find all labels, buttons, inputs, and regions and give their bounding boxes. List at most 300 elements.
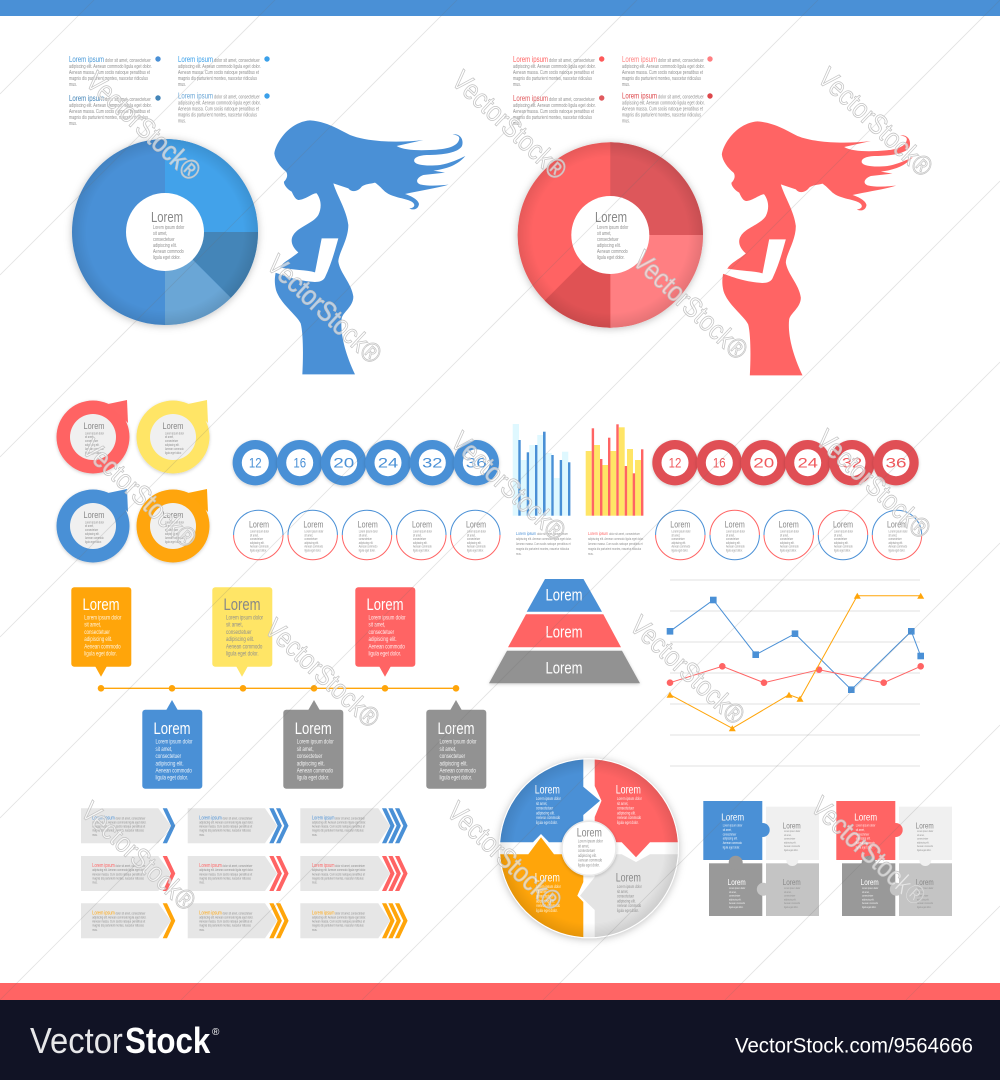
orange row: Lorem ipsum bbox=[92, 910, 115, 916]
pyramid tier 1: Lorem bbox=[545, 586, 583, 605]
red legend item 4: dolor sit amet, consectetuer bbox=[658, 94, 704, 100]
watermarks: VectorStock® bbox=[446, 64, 573, 186]
blue numbered rings: 16 bbox=[293, 456, 306, 471]
blue puzzle: consectetuer bbox=[729, 894, 740, 898]
red donut chart: Lorem ipsum dolor bbox=[597, 224, 629, 231]
thin circle 3: ligula eget dolor. bbox=[359, 548, 376, 553]
red puzzle: ligula eget dolor. bbox=[862, 906, 877, 909]
top blue bar bbox=[0, 0, 1000, 16]
blue quadrant: Aenean commodo bbox=[536, 816, 560, 820]
gray quadrant: Lorem ipsum dolor bbox=[617, 885, 642, 889]
orange quadrant: Lorem bbox=[535, 872, 560, 885]
watermarks bbox=[75, 61, 939, 917]
orange bubble: sit amet, bbox=[165, 524, 174, 528]
blue row: mus. bbox=[92, 832, 98, 837]
red row: Aenean massa. Cum sociis natoque penatibus et bbox=[199, 872, 252, 876]
blue puzzle: Lorem ipsum dolor bbox=[729, 887, 745, 890]
red bubble: adipiscing elit. bbox=[85, 442, 100, 447]
legend item 2: magnis dis parturient montes, nascetur ridiculus bbox=[178, 75, 257, 81]
legend item 4 bbox=[178, 92, 270, 124]
red legend item 1: Aenean massa. Cum sociis natoque penatibus et bbox=[513, 69, 595, 75]
legend item 1: adipiscing elit. Aenean commodo ligula eget dolor. bbox=[69, 63, 152, 69]
red puzzle: Lorem ipsum dolor bbox=[917, 830, 933, 833]
red legend item 2: magnis dis parturient montes, nascetur ridiculus bbox=[622, 75, 701, 81]
red card: Lorem bbox=[366, 595, 404, 614]
arrow cards grid bbox=[81, 808, 408, 938]
thin circle 1: sit amet, bbox=[250, 533, 259, 537]
blue bar chart caption bbox=[516, 530, 572, 556]
blue puzzle: consectetuer bbox=[723, 832, 736, 836]
blue puzzle: Aenean commodo bbox=[723, 841, 742, 845]
red puzzle: adipiscing elit. bbox=[917, 898, 930, 902]
red puzzle: consectetuer bbox=[917, 894, 928, 898]
red donut chart: Lorem bbox=[595, 209, 627, 225]
thin circle 6: adipiscing elit. bbox=[672, 540, 686, 545]
red row: adipiscing elit. Aenean commodo ligula eget dolor. bbox=[92, 868, 146, 872]
legend item 1: mus. bbox=[69, 81, 77, 87]
thin circle 9: Lorem ipsum dolor bbox=[834, 529, 853, 534]
orange quadrant: Lorem ipsum dolor bbox=[536, 885, 561, 889]
orange row: Lorem ipsum bbox=[199, 910, 222, 916]
red numbered rings: 20 bbox=[753, 456, 774, 471]
red puzzle: Aenean commodo bbox=[862, 902, 878, 905]
gray quadrant: ligula eget dolor. bbox=[617, 908, 639, 913]
blue bar chart caption: adipiscing elit. Aenean commodo ligula eget dolor. bbox=[516, 536, 572, 541]
thin circle 2 bbox=[288, 510, 337, 560]
thin circle 4: Aenean commodo bbox=[413, 544, 432, 549]
blue row: Lorem ipsum bbox=[312, 815, 335, 821]
thin circle 3 bbox=[342, 510, 392, 560]
blue series bbox=[667, 597, 924, 693]
thin circle 2: sit amet, bbox=[304, 533, 313, 537]
legend item 1: magnis dis parturient montes, nascetur ridiculus bbox=[69, 75, 148, 81]
thin circle 8: consectetuer bbox=[780, 537, 793, 541]
thin circle 4: adipiscing elit. bbox=[413, 540, 428, 545]
legend item 4: Aenean massa. Cum sociis natoque penatibus et bbox=[178, 106, 260, 112]
red donut chart: ligula eget dolor. bbox=[597, 254, 625, 261]
red numbered rings: 36 bbox=[885, 456, 907, 471]
yellow card: Lorem bbox=[223, 595, 261, 614]
center hub: ligula eget dolor. bbox=[578, 863, 600, 868]
red legend item 2 bbox=[622, 55, 713, 87]
red row: mus. bbox=[199, 880, 205, 885]
thin circle 3: sit amet, bbox=[359, 533, 368, 537]
yellow card: adipiscing elit. bbox=[226, 636, 254, 643]
watermarks: VectorStock® bbox=[627, 244, 754, 366]
blue bubble: consectetuer bbox=[85, 528, 98, 532]
blue-red thin text circles bbox=[234, 510, 500, 560]
red legend item 4: Lorem ipsum bbox=[622, 92, 657, 101]
blue bar chart caption: Aenean massa. Cum sociis natoque penatibus et bbox=[516, 541, 571, 546]
footer logo: Vector bbox=[30, 1022, 123, 1061]
blue donut chart: Aenean commodo bbox=[153, 248, 184, 255]
red row: Aenean massa. Cum sociis natoque penatibus et bbox=[92, 872, 145, 876]
red legend item 1 bbox=[513, 55, 604, 87]
thin circle 7: consectetuer bbox=[726, 537, 739, 541]
red row: dolor sit amet, consectetuer bbox=[116, 863, 145, 868]
thin circle 6: Lorem bbox=[670, 520, 690, 530]
thin circle 9: sit amet, bbox=[834, 533, 843, 537]
orange bubble: consectetuer bbox=[165, 528, 178, 532]
red row: magnis dis parturient montes, nascetur ridiculus bbox=[312, 876, 364, 881]
blue puzzle: ligula eget dolor. bbox=[784, 906, 799, 909]
legend item 3: magnis dis parturient montes, nascetur ridiculus bbox=[69, 114, 148, 120]
thin circle 7: Aenean commodo bbox=[726, 544, 745, 549]
orange row: adipiscing elit. Aenean commodo ligula eget dolor. bbox=[199, 915, 253, 920]
footer logo bbox=[30, 1021, 220, 1062]
red puzzle: Lorem bbox=[861, 877, 879, 887]
yellow bubble: ligula eget dolor. bbox=[165, 450, 182, 455]
blue puzzle: adipiscing elit. bbox=[784, 898, 797, 902]
red bar chart caption: adipiscing elit. Aenean commodo ligula eget dolor. bbox=[588, 536, 644, 541]
blue puzzle: sit amet, bbox=[729, 890, 737, 894]
footer logo: ® bbox=[212, 1027, 220, 1038]
thin circle 6 bbox=[656, 510, 705, 560]
orange quadrant: ligula eget dolor. bbox=[536, 908, 558, 913]
thin circle 2: Aenean commodo bbox=[304, 544, 323, 549]
red legend item 3: Lorem ipsum bbox=[513, 94, 548, 103]
thin circle 8: adipiscing elit. bbox=[780, 540, 795, 545]
yellow card: Aenean commodo bbox=[226, 644, 262, 651]
gray quadrant: Lorem bbox=[616, 872, 641, 885]
red bubble: Lorem bbox=[84, 420, 104, 431]
blue numbered rings: 12 bbox=[249, 456, 262, 471]
blue bubble: ligula eget dolor. bbox=[85, 539, 102, 544]
blue puzzle: Aenean commodo bbox=[784, 845, 800, 848]
pyramid tier 2 bbox=[508, 614, 621, 647]
thin circle 1: Lorem bbox=[249, 520, 269, 530]
orange row: magnis dis parturient montes, nascetur ridiculus bbox=[199, 923, 251, 928]
red row bbox=[81, 856, 408, 891]
blue row: Lorem ipsum bbox=[199, 815, 222, 821]
speech-bubble rings bbox=[56, 400, 210, 562]
center hub: Lorem ipsum dolor bbox=[578, 839, 603, 844]
red legend item 3: dolor sit amet, consectetuer bbox=[549, 96, 595, 102]
blue card: adipiscing elit. bbox=[156, 761, 184, 768]
red bubble: Lorem ipsum dolor bbox=[85, 431, 104, 435]
yellow bubble: sit amet, bbox=[165, 435, 174, 439]
blue bar chart caption: magnis dis parturient montes, nascetur ridiculus bbox=[516, 546, 569, 551]
red series bbox=[667, 663, 924, 686]
thin circle 7: Lorem bbox=[725, 520, 745, 530]
thin circle 9: ligula eget dolor. bbox=[834, 548, 851, 553]
gray card 1: ligula eget dolor. bbox=[297, 775, 330, 782]
blue puzzle: sit amet, bbox=[784, 890, 792, 894]
watermarks: VectorStock® bbox=[624, 609, 751, 731]
red donut chart: adipiscing elit. bbox=[597, 242, 621, 249]
orange row: Aenean massa. Cum sociis natoque penatibus et bbox=[199, 919, 252, 924]
red row: Lorem ipsum bbox=[92, 863, 115, 868]
orange row: dolor sit amet, consectetuer bbox=[222, 911, 252, 915]
legend item 2 bbox=[178, 55, 270, 87]
thin circle 7: Lorem ipsum dolor bbox=[726, 529, 745, 534]
thin circle 1: ligula eget dolor. bbox=[250, 548, 267, 553]
watermarks: VectorStock® bbox=[445, 425, 572, 547]
thin circle 9: adipiscing elit. bbox=[834, 540, 849, 545]
red quadrant bbox=[595, 760, 678, 857]
red bubble: ligula eget dolor. bbox=[85, 450, 102, 455]
red bubble: Aenean commodo bbox=[85, 446, 104, 451]
thin circle 2: adipiscing elit. bbox=[304, 540, 319, 545]
red quadrant: Aenean commodo bbox=[617, 816, 641, 820]
thin circle 2: Lorem bbox=[303, 520, 324, 530]
gray quadrant: adipiscing elit. bbox=[617, 899, 636, 904]
red numbered rings bbox=[652, 440, 919, 485]
center hub: adipiscing elit. bbox=[578, 853, 597, 858]
watermarks: VectorStock® bbox=[259, 612, 386, 734]
orange series bbox=[666, 593, 924, 731]
blue row: dolor sit amet, consectetuer bbox=[222, 816, 252, 820]
blue puzzle: adipiscing elit. bbox=[784, 841, 797, 845]
legend item 4: Lorem ipsum bbox=[178, 92, 213, 101]
thin circle 3: Lorem ipsum dolor bbox=[359, 529, 378, 534]
center hub: sit amet, bbox=[578, 844, 589, 849]
red card: ligula eget dolor. bbox=[368, 651, 401, 658]
legend item 3: adipiscing elit. Aenean commodo ligula eget dolor. bbox=[69, 102, 152, 108]
thin circle 4: ligula eget dolor. bbox=[413, 548, 430, 553]
red pregnant woman silhouette bbox=[721, 121, 913, 375]
blue quadrant: Lorem bbox=[535, 784, 560, 797]
yellow bubble: Aenean commodo bbox=[165, 446, 184, 451]
blue bar chart caption: mus. bbox=[516, 551, 522, 556]
thin circle 10: Lorem bbox=[887, 520, 907, 530]
red puzzle bbox=[836, 801, 952, 916]
red bar chart caption: Aenean massa. Cum sociis natoque penatibus et bbox=[588, 541, 643, 546]
gray quadrant bbox=[580, 854, 678, 937]
blue bar chart caption: dolor sit amet, consectetuer bbox=[537, 531, 568, 536]
legend item 2: Lorem ipsum bbox=[178, 55, 213, 64]
blue row: magnis dis parturient montes, nascetur ridiculus bbox=[199, 828, 251, 833]
blue puzzle: ligula eget dolor. bbox=[729, 906, 744, 909]
thin circle 10: ligula eget dolor. bbox=[888, 548, 905, 553]
red legend item 1: mus. bbox=[513, 81, 521, 87]
blue card: Lorem ipsum dolor bbox=[156, 739, 193, 746]
blue row: mus. bbox=[199, 832, 205, 837]
blue card: Lorem bbox=[153, 719, 191, 738]
thin circle 9: Aenean commodo bbox=[834, 544, 853, 549]
yellow bubble: Lorem bbox=[163, 420, 183, 431]
thin circle 6: Aenean commodo bbox=[672, 544, 690, 549]
thin circle 8: Lorem bbox=[779, 520, 799, 530]
thin circle 3: Lorem bbox=[358, 520, 378, 530]
blue donut chart bbox=[72, 139, 258, 325]
blue puzzle: sit amet, bbox=[723, 827, 732, 832]
thin circle 8 bbox=[764, 510, 813, 560]
red quadrant: sit amet, bbox=[617, 801, 628, 806]
timeline bbox=[71, 587, 486, 789]
blue legend text blocks bbox=[69, 55, 270, 126]
red legend text blocks bbox=[513, 55, 713, 126]
red puzzle: consectetuer bbox=[856, 832, 869, 836]
legend item 3: Aenean massa. Cum sociis natoque penatibus et bbox=[69, 108, 151, 114]
footer image id: VectorStock.com/9564666 bbox=[735, 1035, 973, 1058]
legend item 1 bbox=[69, 55, 161, 87]
orange row: Aenean massa. Cum sociis natoque penatibus et bbox=[92, 919, 145, 924]
red legend item 2: Lorem ipsum bbox=[622, 55, 657, 64]
orange bubble: ligula eget dolor. bbox=[165, 539, 182, 544]
legend item 2: adipiscing elit. Aenean commodo ligula eget dolor. bbox=[178, 63, 261, 69]
gray card 2 bbox=[426, 700, 486, 789]
legend item 4: mus. bbox=[178, 118, 186, 124]
thin circle 7: adipiscing elit. bbox=[726, 540, 741, 545]
blue puzzle: consectetuer bbox=[784, 837, 795, 841]
orange card: ligula eget dolor. bbox=[84, 651, 117, 658]
red row: Aenean massa. Cum sociis natoque penatibus et bbox=[312, 872, 365, 876]
thin circle 9: Lorem bbox=[833, 520, 853, 530]
gray card 2: sit amet, bbox=[440, 746, 457, 753]
thin circle 4: consectetuer bbox=[413, 537, 426, 541]
thin circle 8: Lorem ipsum dolor bbox=[780, 529, 799, 534]
thin circle 1: Lorem ipsum dolor bbox=[250, 529, 269, 534]
blue row: dolor sit amet, consectetuer bbox=[335, 816, 365, 820]
blue numbered rings bbox=[233, 440, 499, 485]
red puzzle: Lorem bbox=[916, 820, 934, 831]
blue row: Aenean massa. Cum sociis natoque penatibus et bbox=[312, 824, 365, 829]
legend item 2: mus. bbox=[178, 81, 186, 87]
yellow card: Lorem ipsum dolor bbox=[226, 615, 263, 622]
orange bubble: adipiscing elit. bbox=[165, 531, 180, 536]
blue bar chart bbox=[513, 424, 570, 516]
red bar chart caption: mus. bbox=[588, 551, 594, 556]
pyramid tier 2: Lorem bbox=[545, 623, 583, 642]
red numbered rings: 32 bbox=[842, 456, 862, 471]
red row: dolor sit amet, consectetuer bbox=[335, 863, 365, 868]
red legend item 4: adipiscing elit. Aenean commodo ligula eget dolor. bbox=[622, 100, 705, 106]
orange quadrant bbox=[500, 837, 583, 937]
blue bubble bbox=[56, 489, 130, 562]
yellow bubble: Lorem ipsum dolor bbox=[165, 431, 184, 435]
blue bubble: adipiscing elit. bbox=[85, 531, 100, 536]
blue puzzle: Lorem ipsum dolor bbox=[784, 887, 800, 890]
red donut chart: Aenean commodo bbox=[597, 248, 628, 255]
red puzzle: ligula eget dolor. bbox=[856, 845, 873, 850]
thin circle 10: adipiscing elit. bbox=[888, 540, 903, 545]
gray card 1: adipiscing elit. bbox=[297, 761, 325, 768]
yellow card: consectetuer bbox=[226, 629, 252, 636]
orange row: mus. bbox=[92, 927, 98, 932]
red puzzle: Lorem bbox=[916, 877, 934, 887]
yellow bubble bbox=[136, 400, 210, 474]
gray card 1: Aenean commodo bbox=[297, 768, 333, 775]
blue donut chart: consectetuer bbox=[153, 236, 175, 243]
red card: consectetuer bbox=[368, 629, 394, 636]
red legend item 3: mus. bbox=[513, 120, 521, 126]
orange card: sit amet, bbox=[84, 622, 102, 629]
blue row: adipiscing elit. Aenean commodo ligula eget dolor. bbox=[312, 820, 366, 825]
gray card 1 bbox=[283, 700, 343, 789]
red puzzle: sit amet, bbox=[917, 833, 925, 837]
legend item 3: mus. bbox=[69, 120, 77, 126]
orange card: Lorem ipsum dolor bbox=[84, 615, 121, 622]
blue row: Aenean massa. Cum sociis natoque penatibus et bbox=[92, 824, 145, 829]
red quadrant: Lorem ipsum dolor bbox=[617, 797, 642, 801]
red bar chart caption: dolor sit amet, consectetuer bbox=[609, 531, 640, 536]
thin circle 9 bbox=[818, 510, 868, 560]
blue puzzle: Lorem bbox=[783, 877, 801, 887]
gray quadrant: sit amet, bbox=[617, 889, 628, 894]
thin circle 9: consectetuer bbox=[834, 537, 847, 541]
blue card: Aenean commodo bbox=[156, 768, 192, 775]
blue card: consectetuer bbox=[156, 753, 181, 760]
orange card: Aenean commodo bbox=[84, 644, 121, 651]
red puzzle: sit amet, bbox=[856, 827, 865, 832]
thin circle 5: sit amet, bbox=[467, 533, 476, 537]
gray card 1: Lorem ipsum dolor bbox=[297, 739, 334, 746]
red legend item 2: Aenean massa. Cum sociis natoque penatibus et bbox=[622, 69, 704, 75]
thin circle 5: Lorem ipsum dolor bbox=[467, 529, 486, 534]
blue card bbox=[142, 700, 202, 789]
thin circle 8: Aenean commodo bbox=[780, 544, 799, 549]
red row: mus. bbox=[312, 880, 317, 885]
red quadrant: ligula eget dolor. bbox=[617, 820, 639, 825]
thin circle 10: Aenean commodo bbox=[888, 544, 907, 549]
gray card 2: Lorem bbox=[437, 719, 475, 738]
red numbered rings: 16 bbox=[713, 456, 726, 471]
red legend item 2: adipiscing elit. Aenean commodo ligula eget dolor. bbox=[622, 63, 705, 69]
red card bbox=[355, 587, 415, 677]
gray card 2: consectetuer bbox=[440, 753, 465, 760]
red puzzle: Lorem ipsum dolor bbox=[856, 823, 875, 828]
thin circle 2: consectetuer bbox=[304, 537, 318, 541]
blue quadrant bbox=[500, 760, 600, 842]
timeline axis bbox=[98, 685, 459, 692]
orange quadrant: adipiscing elit. bbox=[536, 899, 555, 904]
blue puzzle: Lorem ipsum dolor bbox=[723, 823, 742, 828]
thin circle 1: adipiscing elit. bbox=[250, 540, 265, 545]
red donut chart: consectetuer bbox=[597, 236, 619, 243]
red legend item 3: magnis dis parturient montes, nascetur ridiculus bbox=[513, 114, 592, 120]
red numbered rings: 12 bbox=[669, 456, 681, 471]
blue numbered rings: 24 bbox=[378, 456, 398, 471]
thin circle 5: ligula eget dolor. bbox=[467, 548, 484, 553]
gray card 1: Lorem bbox=[295, 719, 332, 738]
blue quadrant: adipiscing elit. bbox=[536, 811, 555, 816]
thin circle 8: sit amet, bbox=[780, 533, 789, 537]
thin circle 8: ligula eget dolor. bbox=[780, 548, 797, 553]
red legend item 1: adipiscing elit. Aenean commodo ligula eget dolor. bbox=[513, 63, 596, 69]
thin circle 10: consectetuer bbox=[888, 537, 902, 541]
gray quadrant: consectetuer bbox=[617, 894, 635, 899]
blue pregnant woman silhouette bbox=[274, 120, 465, 374]
red row: dolor sit amet, consectetuer bbox=[222, 863, 252, 868]
red donut chart: sit amet, bbox=[597, 230, 611, 237]
blue donut chart: sit amet, bbox=[153, 230, 167, 237]
legend item 3: dolor sit amet, consectetuer bbox=[105, 96, 151, 102]
blue row: adipiscing elit. Aenean commodo ligula eget dolor. bbox=[92, 820, 146, 825]
legend item 4: adipiscing elit. Aenean commodo ligula eget dolor. bbox=[178, 100, 261, 106]
red puzzle: Aenean commodo bbox=[917, 902, 933, 905]
thin circle 5 bbox=[451, 510, 500, 560]
orange row: dolor sit amet, consectetuer bbox=[335, 911, 365, 915]
red legend item 2: dolor sit amet, consectetuer bbox=[658, 57, 704, 63]
red and yellow bar chart bbox=[586, 424, 643, 516]
watermarks: VectorStock® bbox=[80, 65, 207, 187]
red row: adipiscing elit. Aenean commodo ligula eget dolor. bbox=[312, 868, 366, 872]
pyramid bbox=[489, 579, 640, 683]
red numbered rings: 24 bbox=[798, 456, 818, 471]
red legend item 1: magnis dis parturient montes, nascetur ridiculus bbox=[513, 75, 592, 81]
red puzzle: Aenean commodo bbox=[917, 845, 933, 848]
blue row: Aenean massa. Cum sociis natoque penatibus et bbox=[199, 824, 252, 829]
watermarks: VectorStock® bbox=[810, 423, 937, 545]
red legend item 4 bbox=[622, 92, 713, 124]
orange row: mus. bbox=[312, 927, 317, 932]
red legend item 3: Aenean massa. Cum sociis natoque penatibus et bbox=[513, 108, 595, 114]
thin circle 2: Lorem ipsum dolor bbox=[304, 529, 323, 534]
orange bubble: Lorem bbox=[163, 509, 183, 520]
watermarks: VectorStock® bbox=[261, 248, 388, 370]
red bar chart caption: Lorem ipsum bbox=[588, 530, 609, 536]
